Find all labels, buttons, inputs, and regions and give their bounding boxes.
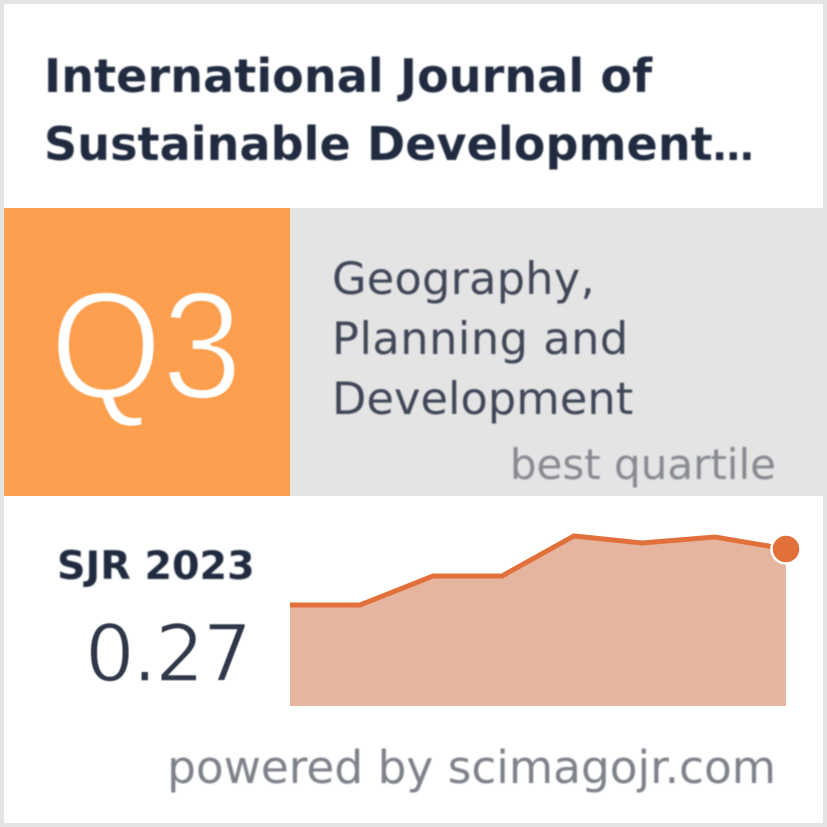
title: International Journal of xyxy=(44,49,652,103)
SJR value: 0.27 xyxy=(85,610,250,700)
quartile value: Q3 xyxy=(50,260,242,431)
title xyxy=(44,49,754,171)
attribution: powered by scimagojr.com xyxy=(167,741,776,794)
panel: quartile badge xyxy=(4,208,290,496)
category name: Planning and xyxy=(332,313,629,365)
category name: Development xyxy=(332,373,633,425)
SJR label: SJR 2023 xyxy=(57,543,255,589)
latest data point xyxy=(772,534,800,564)
area chart xyxy=(290,533,800,706)
title: Sustainable Development… xyxy=(44,117,754,171)
category name xyxy=(332,253,634,425)
category name: Geography, xyxy=(332,253,595,305)
panel: category xyxy=(290,208,827,496)
best quartile label: best quartile xyxy=(510,440,776,489)
